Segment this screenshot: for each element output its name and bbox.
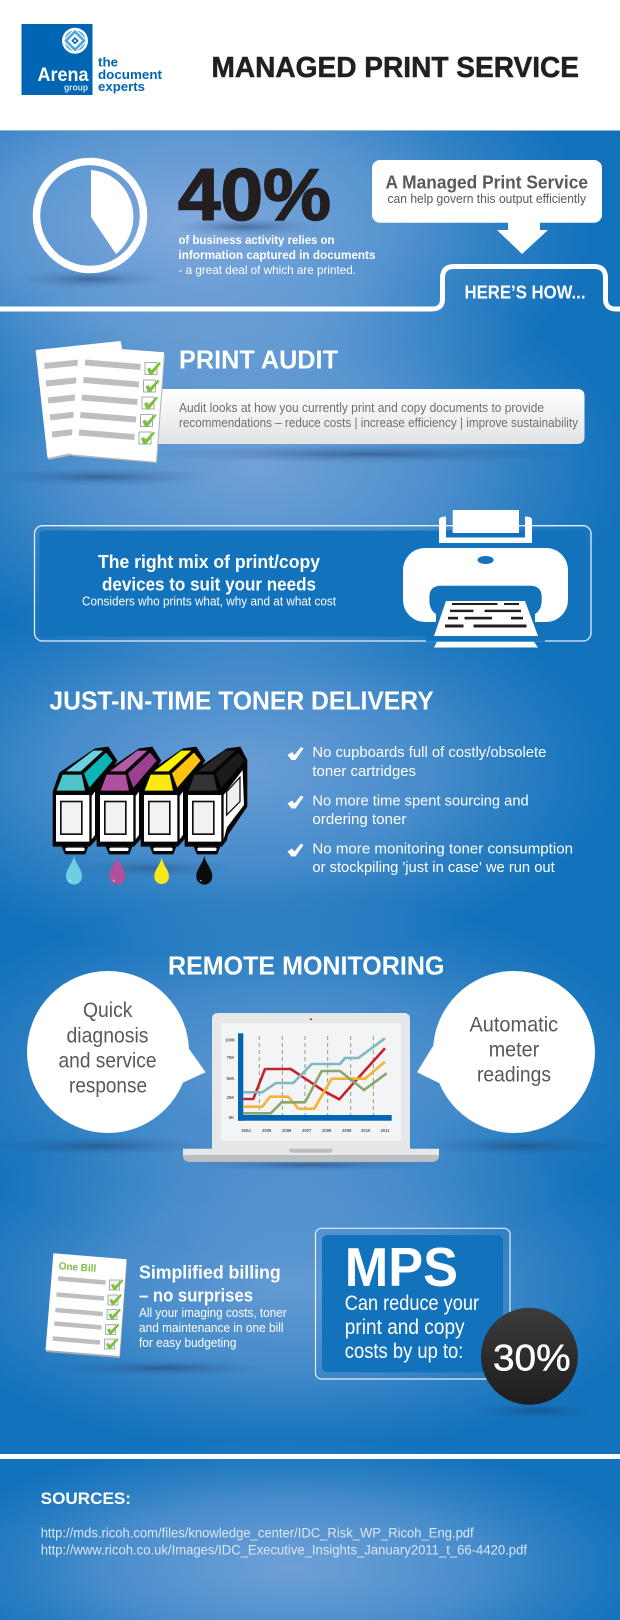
billing text: for easy budgeting (139, 1336, 237, 1350)
billing text: and maintenance in one bill (139, 1321, 284, 1335)
cartridge: black (185, 747, 247, 885)
title: MANAGED PRINT SERVICE (212, 52, 579, 84)
heading: remote monitoring: REMOTE MONITORING (168, 950, 444, 980)
sources: http://mds.ricoh.com/files/knowledge_center/IDC_Risk_WP_Ricoh_Eng.pdf (41, 1526, 474, 1541)
line chart: 2004 (241, 1128, 251, 1133)
cartridge: yellow (141, 747, 205, 884)
panel: MPS savings: Can reduce your (345, 1292, 479, 1315)
logo: Arena group: group (64, 82, 88, 92)
audit description bar: recommendations – reduce costs | increase efficiency | improve sustainability (179, 415, 578, 430)
icon: audit documents (36, 341, 165, 463)
callout: A Managed Print Service: can help govern this output efficiently (388, 192, 587, 206)
line chart: 50K (227, 1076, 234, 1081)
speech bubble: automatic meter readings (417, 971, 595, 1133)
statistic caption: of business activity relies on (178, 233, 334, 247)
icon: check (288, 796, 304, 808)
icon: clock pie (18, 162, 162, 288)
list: toner benefits: No cupboards full of costly/obsolete (312, 744, 546, 761)
tab: here's how: HERE’S HOW... (464, 283, 586, 303)
arrow: down to here's how (497, 222, 548, 254)
list: toner benefits: No more time spent sourcing and (312, 792, 529, 809)
logo: Arena group: experts (98, 79, 145, 94)
speech bubble: quick diagnosis: and service (58, 1048, 156, 1072)
heading: print audit: PRINT AUDIT (179, 344, 338, 374)
speech bubble: automatic meter readings: meter (489, 1038, 539, 1062)
badge: 30%: 30% (493, 1338, 571, 1379)
speech bubble: automatic meter readings: Automatic (470, 1013, 558, 1037)
logo: Arena group: the (98, 55, 118, 70)
billing text: Simplified billing (139, 1263, 281, 1283)
audit description bar (150, 389, 584, 444)
icon: logo emblem (62, 28, 88, 54)
list: toner benefits (288, 744, 573, 876)
logo: Arena group: document (98, 67, 163, 82)
line chart: 2006 (282, 1128, 292, 1133)
panel: right mix of devices (34, 510, 591, 648)
sources: SOURCES: (41, 1489, 131, 1508)
billing text: All your imaging costs, toner (139, 1306, 287, 1320)
icon: one bill document (46, 1253, 127, 1358)
speech bubble: quick diagnosis (27, 971, 206, 1133)
panel: right mix of devices: Considers who prints what, why and at what cost (82, 594, 336, 609)
icon: check (288, 747, 304, 760)
panel: right mix of devices: The right mix of print/copy (98, 551, 321, 572)
panel: right mix of devices: devices to suit your needs (102, 574, 316, 595)
speech bubble: automatic meter readings: readings (477, 1063, 551, 1087)
panel: simplified billing (46, 1253, 287, 1376)
icon: toner cartridges (53, 747, 247, 885)
panel: MPS savings (316, 1228, 595, 1418)
line chart: 0K (229, 1115, 234, 1120)
icon: check (288, 844, 304, 856)
icon: printer (403, 510, 568, 648)
list: toner benefits: ordering toner (312, 811, 406, 828)
statistic caption: - a great deal of which are printed. (178, 263, 356, 277)
sources (41, 1489, 527, 1557)
line chart: 100K (225, 1038, 235, 1042)
list: toner benefits: No more monitoring toner consumption (312, 840, 573, 857)
line chart: 2007 (302, 1128, 312, 1133)
billing text (139, 1263, 287, 1350)
line chart: 25K (227, 1095, 234, 1100)
logo: Arena group: Arena (38, 65, 89, 86)
panel: print audit (0, 341, 584, 486)
speech bubble: quick diagnosis: diagnosis (66, 1024, 148, 1048)
laptop (183, 1013, 439, 1162)
divider band (0, 1454, 620, 1459)
line chart: 2008 (322, 1128, 332, 1133)
tab: here's how (0, 266, 620, 309)
line chart: 2011 (380, 1128, 390, 1133)
cartridge: magenta (97, 747, 161, 885)
cartridge: cyan (53, 747, 117, 885)
sources: http://www.ricoh.co.uk/Images/IDC_Executive_Insights_January2011_t_66-4420.pdf (41, 1542, 527, 1557)
line chart: 2010 (361, 1128, 371, 1133)
panel: MPS savings: costs by up to: (345, 1340, 463, 1363)
audit description bar: Audit looks at how you currently print and copy documents to provide (179, 400, 544, 415)
line chart (225, 1033, 392, 1133)
line chart: 2009 (342, 1128, 352, 1133)
callout: A Managed Print Service (372, 160, 602, 254)
line chart: 75K (227, 1055, 234, 1060)
panel: MPS savings: print and copy (345, 1316, 465, 1339)
list: toner benefits: or stockpiling 'just in case' we run out (312, 859, 556, 876)
panel: 40 percent statistic (18, 155, 376, 288)
badge: 30% (481, 1308, 578, 1405)
panel: remote monitoring graphics (0, 971, 620, 1171)
billing text: – no surprises (139, 1285, 253, 1305)
big number 40%: 40% (178, 155, 331, 236)
icon: one bill document: One Bill (58, 1260, 97, 1275)
statistic caption: information captured in documents (178, 248, 376, 262)
list: toner benefits: toner cartridges (312, 763, 416, 780)
line chart: 2005 (262, 1128, 272, 1133)
logo: Arena group (22, 24, 163, 95)
statistic caption (178, 233, 376, 277)
panel: MPS savings: MPS (345, 1236, 458, 1298)
heading: just-in-time toner delivery: JUST-IN-TIME TONER DELIVERY (49, 685, 434, 715)
callout: A Managed Print Service: A Managed Print Service (386, 173, 588, 193)
speech bubble: quick diagnosis: Quick (83, 998, 133, 1022)
speech bubble: quick diagnosis: response (69, 1074, 147, 1098)
